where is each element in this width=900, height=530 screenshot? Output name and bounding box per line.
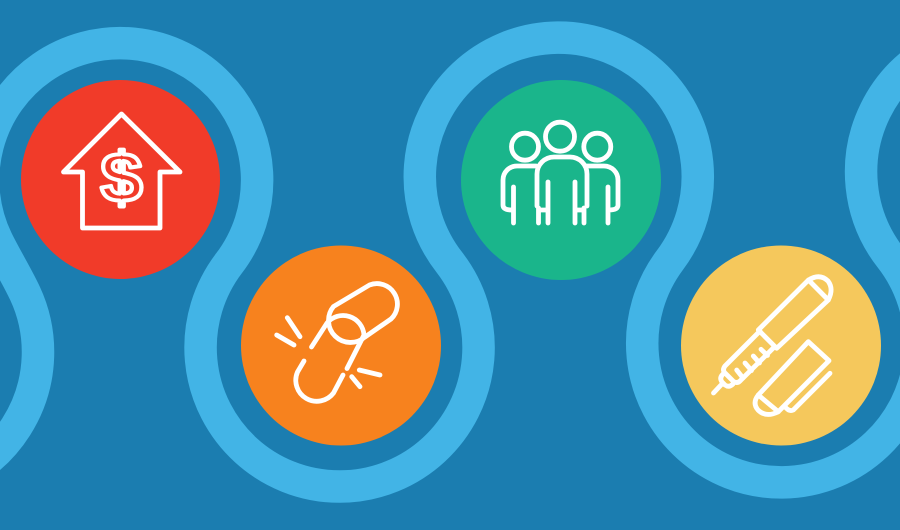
panel: broken chain [241,246,441,446]
icon: three people [503,122,618,223]
green circle [461,80,661,280]
icon: house [64,114,180,228]
red circle [21,80,220,279]
panel: house with dollar [21,80,220,279]
yellow circle [681,246,881,446]
panel: group of people [461,80,661,280]
icon: pen and cap [714,277,831,414]
icon: broken chain link [277,284,397,401]
panel: pen and cap [681,246,881,446]
icon: dollar sign: $ [100,139,143,217]
orange circle [241,246,441,446]
